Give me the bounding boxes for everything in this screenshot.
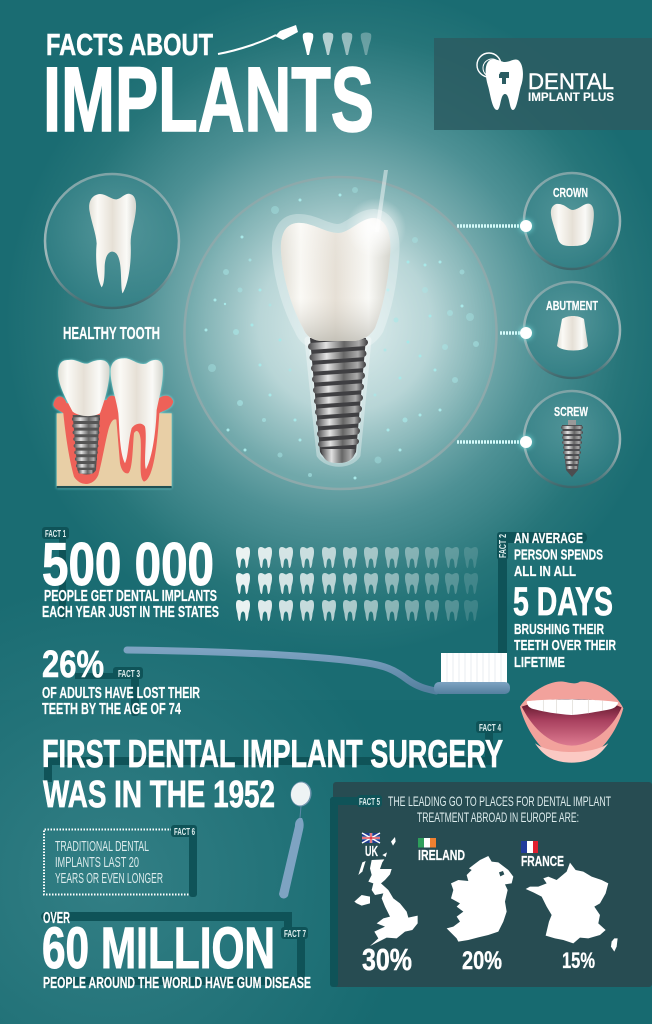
panel: fact 4: FACT 4 — [479, 722, 501, 734]
panel: fact 5 europe — [330, 782, 652, 987]
panel: logo — [434, 38, 652, 130]
icon: large toothbrush — [127, 650, 510, 694]
label: UK: UK — [365, 843, 378, 860]
panel: fact 1 — [42, 527, 219, 621]
text: implants last 20: IMPLANTS LAST 20 — [55, 854, 139, 871]
stat: 60 million: 60 MILLION — [42, 916, 275, 981]
label: screw: SCREW — [554, 404, 589, 419]
icon: healthy tooth — [89, 194, 136, 293]
sparkle particles — [204, 187, 479, 480]
stat: 15%: 15% — [562, 948, 595, 973]
icon: France flag — [521, 841, 538, 853]
text: adults lost teeth: OF ADULTS HAVE LOST THEIR — [42, 685, 200, 702]
text: an average: AN AVERAGE — [514, 530, 583, 547]
icon: UK flag — [362, 833, 380, 843]
panel: fact 3 — [42, 644, 200, 718]
panel: healthy tooth circle — [45, 174, 179, 308]
text: each year: EACH YEAR JUST IN THE STATES — [42, 604, 219, 621]
text: all in all: ALL IN ALL — [514, 563, 576, 580]
text: years or longer: YEARS OR EVEN LONGER — [55, 870, 163, 887]
label: healthy tooth: HEALTHY TOOTH — [63, 323, 160, 343]
panel: fact 3: FACT 3 — [118, 668, 140, 680]
label: abutment: ABUTMENT — [546, 298, 598, 313]
label: crown: CROWN — [553, 185, 588, 200]
panel: screw circle — [524, 391, 620, 487]
screw — [72, 415, 100, 474]
arrow: abutment connector — [500, 327, 532, 339]
stat: 500 000: 500 000 — [42, 531, 214, 598]
panel: fact 6 — [44, 825, 197, 897]
icon: smiling mouth — [520, 681, 623, 763]
text: gum disease: PEOPLE AROUND THE WORLD HAVE GUM DISEASE — [43, 975, 311, 992]
icon: dental mirror — [279, 780, 313, 898]
light flare — [346, 170, 406, 258]
heading: facts about: FACTS ABOUT — [46, 28, 213, 62]
stat: 5 days: 5 DAYS — [513, 580, 613, 624]
stat: 30%: 30% — [362, 942, 412, 977]
arrow: screw connector — [457, 436, 532, 448]
text: lifetime: LIFETIME — [514, 654, 565, 671]
implant crown — [281, 218, 390, 341]
panel: fact 7: FACT 7 — [284, 928, 306, 940]
stat: 26%: 26% — [42, 644, 104, 686]
map: UK — [354, 837, 418, 946]
panel: fact 2 — [497, 530, 616, 671]
heading: was in the 1952: WAS IN THE 1952 — [43, 774, 275, 816]
icon: crown — [551, 204, 594, 246]
text: brushing their: BRUSHING THEIR — [514, 621, 604, 638]
pictogram: rows of teeth — [236, 547, 478, 621]
label: France: FRANCE — [521, 853, 564, 870]
stat: 20%: 20% — [462, 947, 502, 975]
illustration: implant and tooth cross-section — [53, 358, 173, 488]
icon: screw — [561, 420, 583, 477]
implant halo — [281, 218, 390, 463]
panel: fact 1: FACT 1 — [45, 528, 66, 540]
panel: central implant bubble — [184, 170, 496, 489]
text: over: OVER — [43, 910, 70, 927]
text: person spends: PERSON SPENDS — [514, 546, 603, 564]
implant screw — [308, 338, 368, 463]
label: Ireland: IRELAND — [418, 847, 465, 864]
panel: abutment circle — [524, 282, 620, 378]
icon: logo tooth — [477, 53, 523, 110]
map: Ireland — [447, 856, 513, 942]
text: people get implants: PEOPLE GET DENTAL IMPLANTS — [44, 588, 217, 605]
icon: abutment — [557, 316, 588, 350]
text: by age 74: TEETH BY THE AGE OF 74 — [42, 701, 181, 718]
panel: crown circle — [524, 173, 620, 269]
text: dental: DENTAL — [528, 69, 614, 94]
icon: toothbrush with fading teeth — [218, 25, 371, 55]
heading: implants: IMPLANTS — [43, 49, 374, 151]
panel: fact 6: FACT 6 — [174, 826, 195, 838]
panel: fact 2: FACT 2 — [498, 534, 509, 558]
map: France — [526, 863, 618, 952]
panel: fact 7 — [41, 910, 311, 992]
panel: fact 5 europe: FACT 5 — [359, 796, 380, 808]
icon: Ireland flag — [418, 838, 436, 848]
arrow: crown connector — [457, 220, 532, 232]
panel: fact 4 — [42, 721, 503, 816]
text: traditional dental: TRADITIONAL DENTAL — [55, 838, 149, 855]
text: implant plus: IMPLANT PLUS — [528, 92, 614, 104]
